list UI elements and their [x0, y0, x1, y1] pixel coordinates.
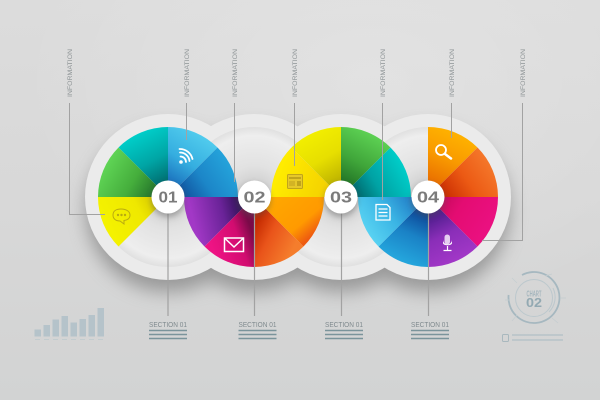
information labels: INFORMATION	[232, 49, 239, 97]
badge 02: 02	[244, 190, 266, 207]
icon: speech bubble	[113, 209, 130, 224]
badge 02	[238, 180, 271, 214]
section 01: SECTION 01	[149, 320, 187, 329]
icon: document	[376, 204, 390, 220]
information labels: INFORMATION	[67, 49, 74, 97]
icon: magnifier	[436, 145, 451, 158]
panel: circle 02	[184, 197, 324, 267]
information labels: INFORMATION	[449, 49, 456, 97]
panel: circle 01	[98, 127, 238, 246]
badge 01: 01	[158, 190, 178, 207]
information labels: INFORMATION	[184, 49, 191, 97]
icon: envelope	[224, 238, 244, 252]
section 03	[325, 320, 363, 338]
section 04: SECTION 01	[411, 320, 449, 329]
information labels: INFORMATION	[380, 49, 387, 97]
white interlocking rings	[85, 114, 511, 280]
ring shadow	[86, 128, 510, 292]
section 04	[411, 320, 449, 338]
section 01	[149, 320, 187, 338]
badge 04	[412, 180, 444, 214]
icon: wifi	[179, 149, 192, 164]
empty grey sectors	[118, 127, 428, 267]
badge 03	[324, 180, 358, 214]
icon: microphone	[443, 234, 452, 250]
bar chart	[34, 308, 104, 340]
chart 02 gauge	[505, 272, 566, 323]
leader lines	[70, 103, 522, 316]
icon: newspaper	[288, 174, 302, 188]
number badge shadows	[151, 183, 445, 217]
badge 03: 03	[330, 190, 352, 207]
information labels: INFORMATION	[520, 49, 527, 97]
chart 02 caption	[502, 334, 563, 342]
panel: circle 03	[271, 127, 411, 197]
panel: circle 04	[358, 127, 498, 267]
badge 04: 04	[417, 190, 439, 207]
section 03: SECTION 01	[325, 320, 363, 329]
information labels: INFORMATION	[292, 49, 299, 97]
chart 02 gauge: 02	[526, 295, 542, 310]
badge 01	[152, 180, 184, 214]
section 02: SECTION 01	[238, 320, 276, 329]
chart 02 gauge: CHART	[526, 290, 542, 298]
section 02	[238, 320, 276, 338]
information labels	[67, 49, 527, 97]
